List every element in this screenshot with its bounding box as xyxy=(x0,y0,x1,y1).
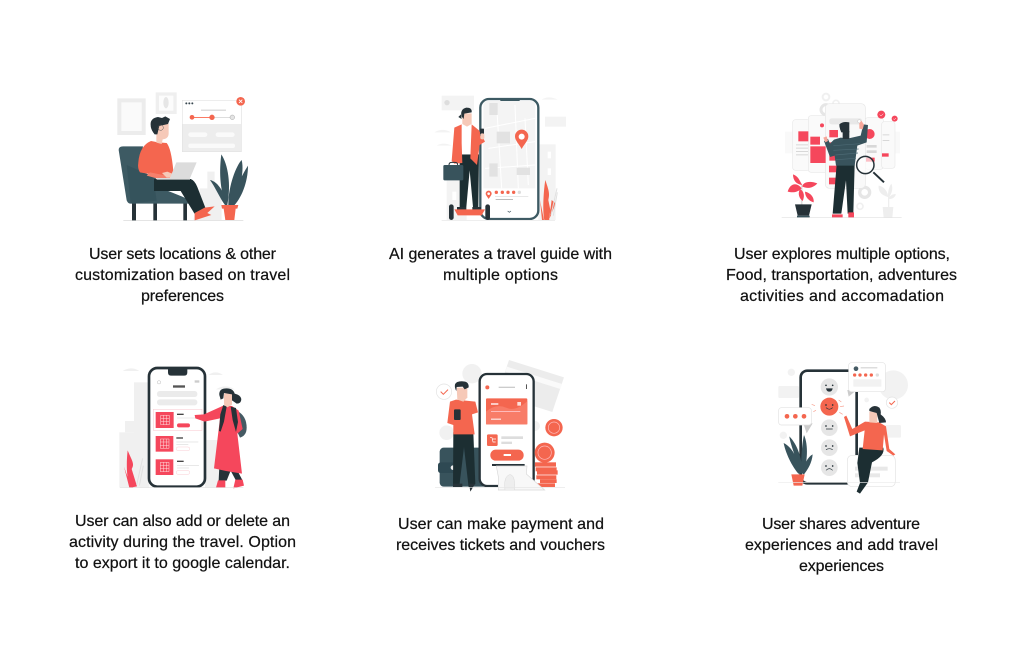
wallet xyxy=(438,448,490,487)
side table xyxy=(193,172,222,220)
armchair xyxy=(119,146,192,220)
caption: step 2: multiple options xyxy=(443,267,558,284)
plant in pot xyxy=(784,435,813,486)
phone xyxy=(801,371,857,483)
background coins xyxy=(439,364,540,440)
back screens xyxy=(793,116,895,172)
illustration: man on hoverboard beside phone map xyxy=(434,96,566,221)
laptop xyxy=(157,162,197,180)
illustration: man examining app screens xyxy=(782,94,902,218)
floor line xyxy=(778,481,900,484)
settings window xyxy=(182,97,245,152)
caption: step 6: experiences and add travel xyxy=(745,537,938,554)
background city xyxy=(119,368,235,488)
check badge xyxy=(886,397,898,408)
rating row xyxy=(486,191,528,212)
red plant xyxy=(124,450,137,488)
caption: step 5 xyxy=(396,516,605,554)
floor line xyxy=(123,219,243,222)
caption: step 6: User shares adventure xyxy=(762,516,920,533)
pay button xyxy=(490,450,524,461)
text lines on screens xyxy=(796,134,889,155)
floor line xyxy=(120,486,243,489)
caption: step 1: preferences xyxy=(141,288,224,305)
caption: step 5: User can make payment and xyxy=(398,516,604,533)
panel: step 5 payment xyxy=(396,360,605,554)
grey plant in pot xyxy=(879,184,896,218)
man with briefcase xyxy=(443,108,485,210)
man from behind xyxy=(823,121,868,218)
panel: step 2 AI travel guide xyxy=(389,96,612,284)
caption: step 1 xyxy=(75,246,290,305)
panel: step 4 edit activities xyxy=(69,368,296,572)
caption: step 3: Food, transportation, adventures xyxy=(726,267,957,284)
sparkle lines xyxy=(812,400,844,414)
man xyxy=(138,116,215,220)
floor line xyxy=(435,486,565,489)
floor line xyxy=(442,219,555,222)
panel: step 1 set preferences xyxy=(75,92,290,305)
check marks and avatar xyxy=(880,114,896,120)
man xyxy=(447,381,478,492)
panel: step 3 explore options xyxy=(726,94,957,305)
front screen xyxy=(825,104,865,188)
caption: step 6: experiences xyxy=(799,558,884,575)
check bubble xyxy=(436,384,452,399)
red plant xyxy=(540,180,556,220)
review speech bubble xyxy=(847,363,885,397)
hoverboard xyxy=(449,204,490,220)
booking cards xyxy=(153,409,202,475)
caption: step 3: User explores multiple options, xyxy=(734,246,950,263)
potted plant xyxy=(210,154,248,220)
caption: step 4 xyxy=(69,513,296,572)
receipt xyxy=(492,464,545,490)
caption: step 2 xyxy=(389,246,612,284)
phone xyxy=(480,99,538,219)
illustration: man paying by phone with wallet and coins xyxy=(435,360,565,492)
background shapes xyxy=(778,369,908,439)
caption: step 4: User can also add or delete an xyxy=(75,513,290,530)
caption: step 3: activities and accomadation xyxy=(740,288,944,305)
map pin xyxy=(515,130,528,149)
background elements xyxy=(434,96,566,220)
red plant in pot xyxy=(788,174,817,218)
floor line xyxy=(782,216,902,219)
illustration: woman pointing at booking phone xyxy=(119,368,247,488)
magnifying glass xyxy=(857,156,884,182)
background credit card xyxy=(497,360,564,412)
red content blocks xyxy=(798,111,898,184)
cart button xyxy=(487,434,523,446)
caption: step 1: User sets locations & other xyxy=(89,246,277,263)
caption: step 5: receives tickets and vouchers xyxy=(396,537,605,554)
caption: step 4: to export it to google calendar. xyxy=(75,555,290,572)
gears and backdrop xyxy=(785,94,900,209)
panel: step 6 share experiences xyxy=(745,363,938,575)
caption: step 3 xyxy=(726,246,957,305)
illustration: man in armchair with laptop xyxy=(117,92,248,221)
woman with backpack xyxy=(195,388,247,488)
caption: step 4: activity during the travel. Option xyxy=(69,534,296,551)
caption: step 1: customization based on travel xyxy=(75,267,290,284)
three star bubble xyxy=(779,408,813,433)
illustration: woman rating experiences on phone xyxy=(778,363,908,494)
phone xyxy=(480,374,534,486)
emoji rating column xyxy=(820,378,838,476)
caption: step 6 xyxy=(745,516,938,575)
coins xyxy=(535,419,563,487)
caption: step 2: AI generates a travel guide with xyxy=(389,246,612,263)
wall pictures xyxy=(117,92,177,135)
woman on speech bubble seat xyxy=(844,406,895,494)
payment card xyxy=(486,398,527,424)
phone xyxy=(149,368,205,487)
